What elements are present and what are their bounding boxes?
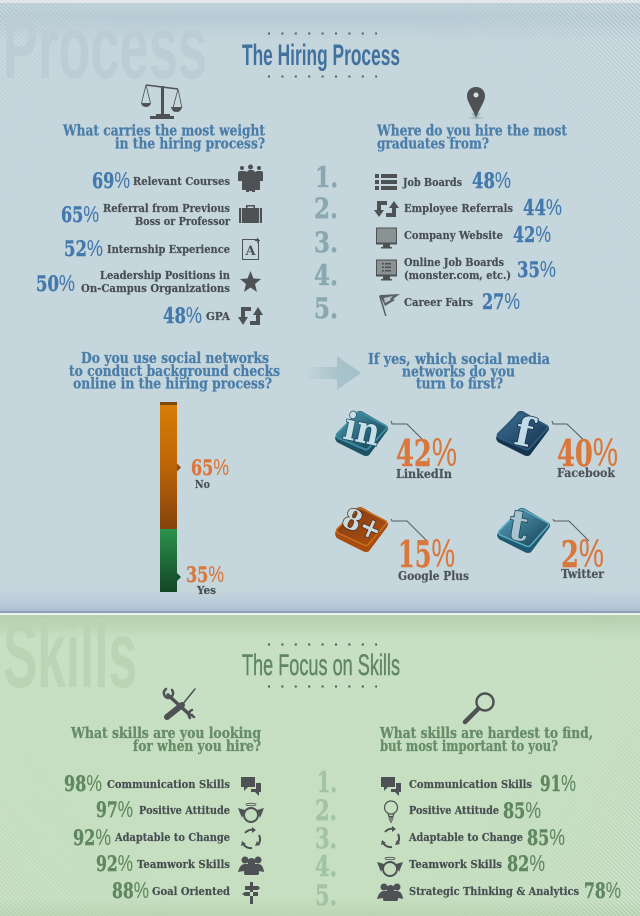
row: communication skills — [64, 770, 261, 796]
row: teamwork skills — [377, 850, 545, 876]
row: strategic thinking: Strategic Thinking & Analytics — [409, 885, 579, 898]
row: job boards: Job Boards — [402, 176, 462, 189]
row: company website — [376, 221, 551, 248]
social: LinkedIn: LinkedIn — [396, 466, 452, 481]
decorative dots below title — [268, 76, 377, 78]
row: employee referrals: 44% — [523, 194, 562, 220]
row: internship: + — [254, 235, 261, 245]
row: positive attitude — [96, 796, 264, 822]
row: teamwork skills: Teamwork Skills — [409, 858, 502, 871]
row: leadership: Leadership Positions in — [100, 269, 230, 282]
row: teamwork skills: 92% — [96, 850, 133, 876]
row: online job boards — [376, 256, 556, 282]
heading: skills looking for: What skills are you looking — [70, 725, 261, 742]
label: No 65%: 65% — [191, 454, 229, 480]
icon: tools — [164, 689, 195, 718]
row: relevant courses: Relevant Courses — [133, 175, 230, 188]
heading: graduates question: graduates from? — [377, 136, 489, 152]
label: Yes 35%: Yes — [196, 584, 216, 597]
social: Google Plus: 15% — [398, 532, 455, 576]
heading: which social media: networks do you — [402, 364, 515, 380]
decorative dots above skills title — [268, 644, 377, 646]
social: Twitter: t — [505, 500, 533, 551]
heading: social networks question: Do you use social networks — [81, 350, 269, 367]
row: job boards: 48% — [472, 167, 511, 193]
rank numbers: 3. — [315, 822, 337, 855]
social: Facebook: Facebook — [557, 465, 615, 480]
row: GPA — [163, 302, 263, 328]
row: communication skills: 91% — [540, 770, 576, 796]
rank numbers: 5. — [315, 879, 337, 912]
list: where graduates are hired from — [314, 161, 562, 325]
title: The Focus on Skills: The Focus on Skills — [242, 649, 400, 682]
panel: hiring process background — [0, 0, 640, 615]
social: Twitter: 2% — [561, 532, 604, 576]
heading: skills hardest to find: but most important to you? — [380, 738, 558, 755]
row: leadership: On-Campus Organizations — [81, 282, 230, 295]
row: positive attitude: 85% — [503, 797, 541, 823]
row: strategic thinking: 78% — [584, 877, 621, 903]
rank numbers: 1. — [315, 161, 338, 194]
row: adaptable to change: 92% — [73, 824, 111, 850]
heading: skills hardest to find — [379, 725, 593, 755]
row: GPA: 48% — [163, 302, 202, 328]
rank numbers: 2. — [315, 794, 337, 827]
row: career fairs: Career Fairs — [404, 296, 473, 309]
list: skills hardest to find — [315, 766, 621, 912]
rank numbers: 5. — [314, 292, 338, 325]
icon: scales — [141, 85, 182, 119]
row: teamwork skills: Teamwork Skills — [137, 858, 230, 871]
row: adaptable to change — [381, 824, 565, 850]
row: career fairs: 27% — [482, 288, 520, 314]
social: Google Plus — [337, 501, 469, 583]
row: company website: 42% — [513, 221, 551, 247]
label: Yes 35% — [177, 561, 224, 597]
social: Google Plus: 8+ — [337, 501, 387, 548]
row: employee referrals: Employee Referrals — [404, 202, 513, 215]
heading: which social media — [368, 351, 551, 392]
row: adaptable to change: 85% — [527, 824, 565, 850]
row: positive attitude: Positive Attitude — [409, 804, 499, 817]
row: company website: Company Website — [404, 229, 503, 242]
heading: which social media: turn to first? — [416, 376, 503, 392]
heading: weight question: in the hiring process? — [115, 136, 265, 152]
row: referral: Boss or Professor — [135, 215, 230, 228]
rank numbers: 2. — [314, 192, 338, 225]
row: online job boards: 35% — [517, 256, 556, 282]
social: Facebook: f — [511, 408, 540, 458]
heading: skills looking for — [70, 725, 261, 755]
heading: weight question — [62, 122, 265, 152]
row: goal oriented: Goal Oriented — [152, 885, 230, 898]
list: skills looking for — [64, 770, 264, 904]
social: Facebook — [498, 408, 618, 480]
heading: weight question: What carries the most weight — [62, 122, 265, 140]
row: communication skills — [381, 770, 576, 796]
rank numbers: 4. — [314, 259, 338, 292]
social: Facebook: 40% — [557, 431, 618, 475]
heading: skills hardest to find: What skills are hardest to find, — [379, 725, 593, 742]
label: No 65%: No — [195, 478, 210, 491]
social: LinkedIn — [337, 403, 457, 481]
chart: stacked bar yes/no — [160, 402, 229, 597]
row: leadership — [36, 269, 261, 296]
row: referral: 65% — [61, 201, 99, 227]
list: what carries the most weight — [36, 164, 263, 328]
rank numbers: 3. — [314, 226, 338, 259]
heading: social networks question — [69, 350, 280, 392]
row: internship: A — [244, 244, 256, 259]
row: teamwork skills — [96, 850, 264, 876]
row: internship: Internship Experience — [107, 243, 230, 256]
label: No 65% — [177, 454, 229, 491]
row: teamwork skills: 82% — [507, 850, 545, 876]
row: goal oriented: 88% — [112, 877, 149, 903]
social: Twitter: Twitter — [561, 566, 604, 581]
background word: Process: Process — [3, 0, 207, 98]
label: Yes 35%: 35% — [186, 561, 224, 587]
background word: Skills: Skills — [3, 602, 137, 708]
row: relevant courses: 69% — [92, 167, 130, 193]
row: online job boards: Online Job Boards — [404, 256, 504, 269]
row: communication skills: Communication Skills — [409, 778, 532, 791]
row: leadership: 50% — [36, 270, 75, 296]
icon: map pin — [467, 87, 485, 120]
row: positive attitude: 97% — [96, 796, 133, 822]
row: communication skills: Communication Skills — [107, 778, 230, 791]
heading: skills looking for: for when you hire? — [133, 738, 261, 755]
row: positive attitude: Positive Attitude — [139, 804, 230, 817]
row: internship: 52% — [64, 235, 103, 261]
social: LinkedIn: 42% — [396, 431, 457, 475]
panel: skills background — [0, 615, 640, 916]
social: LinkedIn: in — [340, 403, 385, 455]
heading: graduates question — [376, 122, 567, 152]
arrow between questions — [305, 356, 361, 390]
row: internship — [64, 235, 261, 261]
heading: graduates question: Where do you hire the most — [376, 122, 567, 140]
row: GPA: GPA — [206, 310, 230, 323]
decorative dots below skills title — [268, 686, 377, 688]
title: The Hiring Process: The Hiring Process — [242, 39, 400, 72]
rank numbers: 4. — [315, 850, 337, 883]
row: career fairs — [379, 288, 520, 316]
row: relevant courses — [92, 164, 263, 193]
row: communication skills: 98% — [64, 770, 102, 796]
row: strategic thinking — [377, 877, 621, 903]
row: referral — [61, 201, 262, 228]
icon: magnifier — [465, 694, 494, 722]
row: employee referrals — [374, 194, 562, 220]
row: adaptable to change: Adaptable to Change — [408, 831, 523, 844]
row: online job boards: (monster.com, etc.) — [404, 269, 511, 282]
row: adaptable to change — [73, 824, 260, 850]
row: job boards — [375, 167, 511, 193]
row: adaptable to change: Adaptable to Change — [114, 831, 230, 844]
social: Twitter — [499, 500, 604, 581]
rank numbers — [315, 766, 337, 912]
row: referral: Referral from Previous — [103, 202, 230, 215]
row: positive attitude — [384, 797, 541, 823]
rank numbers — [314, 161, 338, 325]
social: Google Plus: Google Plus — [398, 568, 469, 583]
row: goal oriented — [112, 877, 260, 904]
rank numbers: 1. — [317, 766, 337, 799]
heading: which social media: If yes, which social media — [368, 351, 551, 368]
heading: social networks question: to conduct background checks — [69, 363, 280, 380]
decorative dots above title — [268, 32, 377, 34]
heading: social networks question: online in the hiring process? — [73, 376, 272, 392]
